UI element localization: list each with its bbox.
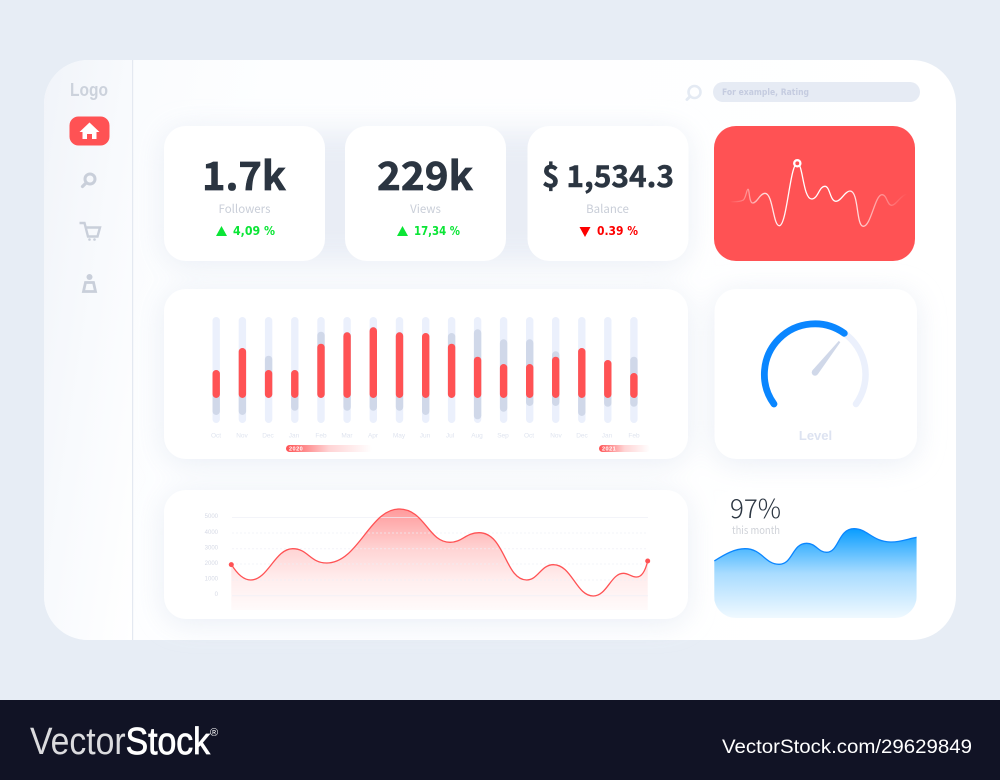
icon: cart <box>80 223 100 241</box>
dashboard panel <box>44 60 956 640</box>
panel: pulse <box>714 126 915 261</box>
panel: views: 229k <box>377 146 473 202</box>
grey bars <box>212 327 638 419</box>
month labels: Sep <box>497 432 509 440</box>
footer id: VectorStock.com/29629849 <box>722 736 972 758</box>
gauge track <box>844 333 866 404</box>
year tag 2021 <box>599 445 650 453</box>
icon: search <box>687 86 700 100</box>
panel: views: Views <box>410 201 441 217</box>
month labels: Jan <box>602 432 613 440</box>
panel: monthly percentage <box>714 489 917 618</box>
change indicator <box>580 223 638 238</box>
red bars <box>212 327 638 398</box>
icon: user <box>84 274 96 292</box>
month labels: Feb <box>628 432 640 440</box>
month labels: May <box>393 432 406 440</box>
panel: balance <box>528 126 688 261</box>
month labels: Nov <box>236 432 249 440</box>
change indicator <box>397 223 460 238</box>
month labels: Oct <box>211 432 221 440</box>
month labels: Mar <box>341 432 353 440</box>
panel: monthly bar chart <box>164 289 688 459</box>
y axis labels: 4000 <box>205 530 219 536</box>
percentage caption: this month <box>732 523 780 538</box>
y axis labels: 2000 <box>205 561 219 567</box>
trend line <box>231 509 648 596</box>
panel: followers: 1.7k <box>202 146 286 202</box>
month labels: Aug <box>471 432 483 440</box>
panel: area line chart <box>164 490 688 619</box>
month labels: Nov <box>550 432 563 440</box>
blue area chart <box>714 529 917 618</box>
month labels: Apr <box>368 432 379 440</box>
y axis labels <box>205 514 219 598</box>
registered mark: ® <box>210 727 218 739</box>
year tag 2020 <box>286 445 372 453</box>
change indicator <box>216 223 275 238</box>
search bar: For example, Rating <box>722 88 809 98</box>
month labels: Feb <box>315 432 327 440</box>
start point <box>229 562 234 567</box>
y axis labels: 5000 <box>205 514 219 520</box>
gauge needle <box>812 341 840 376</box>
footer bar <box>0 700 1000 780</box>
percentage value: 97% <box>730 489 781 526</box>
gauge value arc <box>764 324 844 404</box>
y axis labels: 3000 <box>205 546 219 552</box>
sidebar <box>44 60 133 640</box>
month labels: Jan <box>289 432 300 440</box>
change indicator: 17,34 % <box>414 223 460 238</box>
y axis labels: 1000 <box>205 576 219 582</box>
grid lines <box>232 518 648 596</box>
month labels: Dec <box>262 432 275 440</box>
wave line <box>730 163 907 226</box>
month labels: Jun <box>420 432 431 440</box>
gauge label: Level <box>799 428 832 443</box>
month labels: Jul <box>446 432 455 440</box>
change indicator: 4,09 % <box>233 223 275 238</box>
panel: followers: Followers <box>219 201 270 217</box>
panel: balance: Balance <box>586 201 629 217</box>
y axis labels: 0 <box>215 592 219 598</box>
change indicator: 0.39 % <box>597 223 638 238</box>
footer logo: VectorStock <box>30 721 211 763</box>
end point <box>645 558 650 564</box>
year tag 2021: 2021 <box>602 447 616 453</box>
icon: home button <box>70 116 110 146</box>
soft card shadows <box>164 130 917 623</box>
logo text: Logo <box>70 80 108 100</box>
search bar <box>687 82 920 102</box>
panel: followers <box>164 126 325 261</box>
month labels: Oct <box>524 432 534 440</box>
panel: level gauge <box>714 289 917 459</box>
month labels <box>211 432 640 440</box>
panel: views <box>345 126 506 261</box>
bar tracks <box>212 317 638 423</box>
icon: search <box>82 174 95 186</box>
area fill <box>231 509 648 610</box>
year tag 2020: 2020 <box>289 447 303 453</box>
peak marker <box>794 160 800 166</box>
panel: balance: $ 1,534.3 <box>542 152 674 196</box>
month labels: Dec <box>576 432 589 440</box>
